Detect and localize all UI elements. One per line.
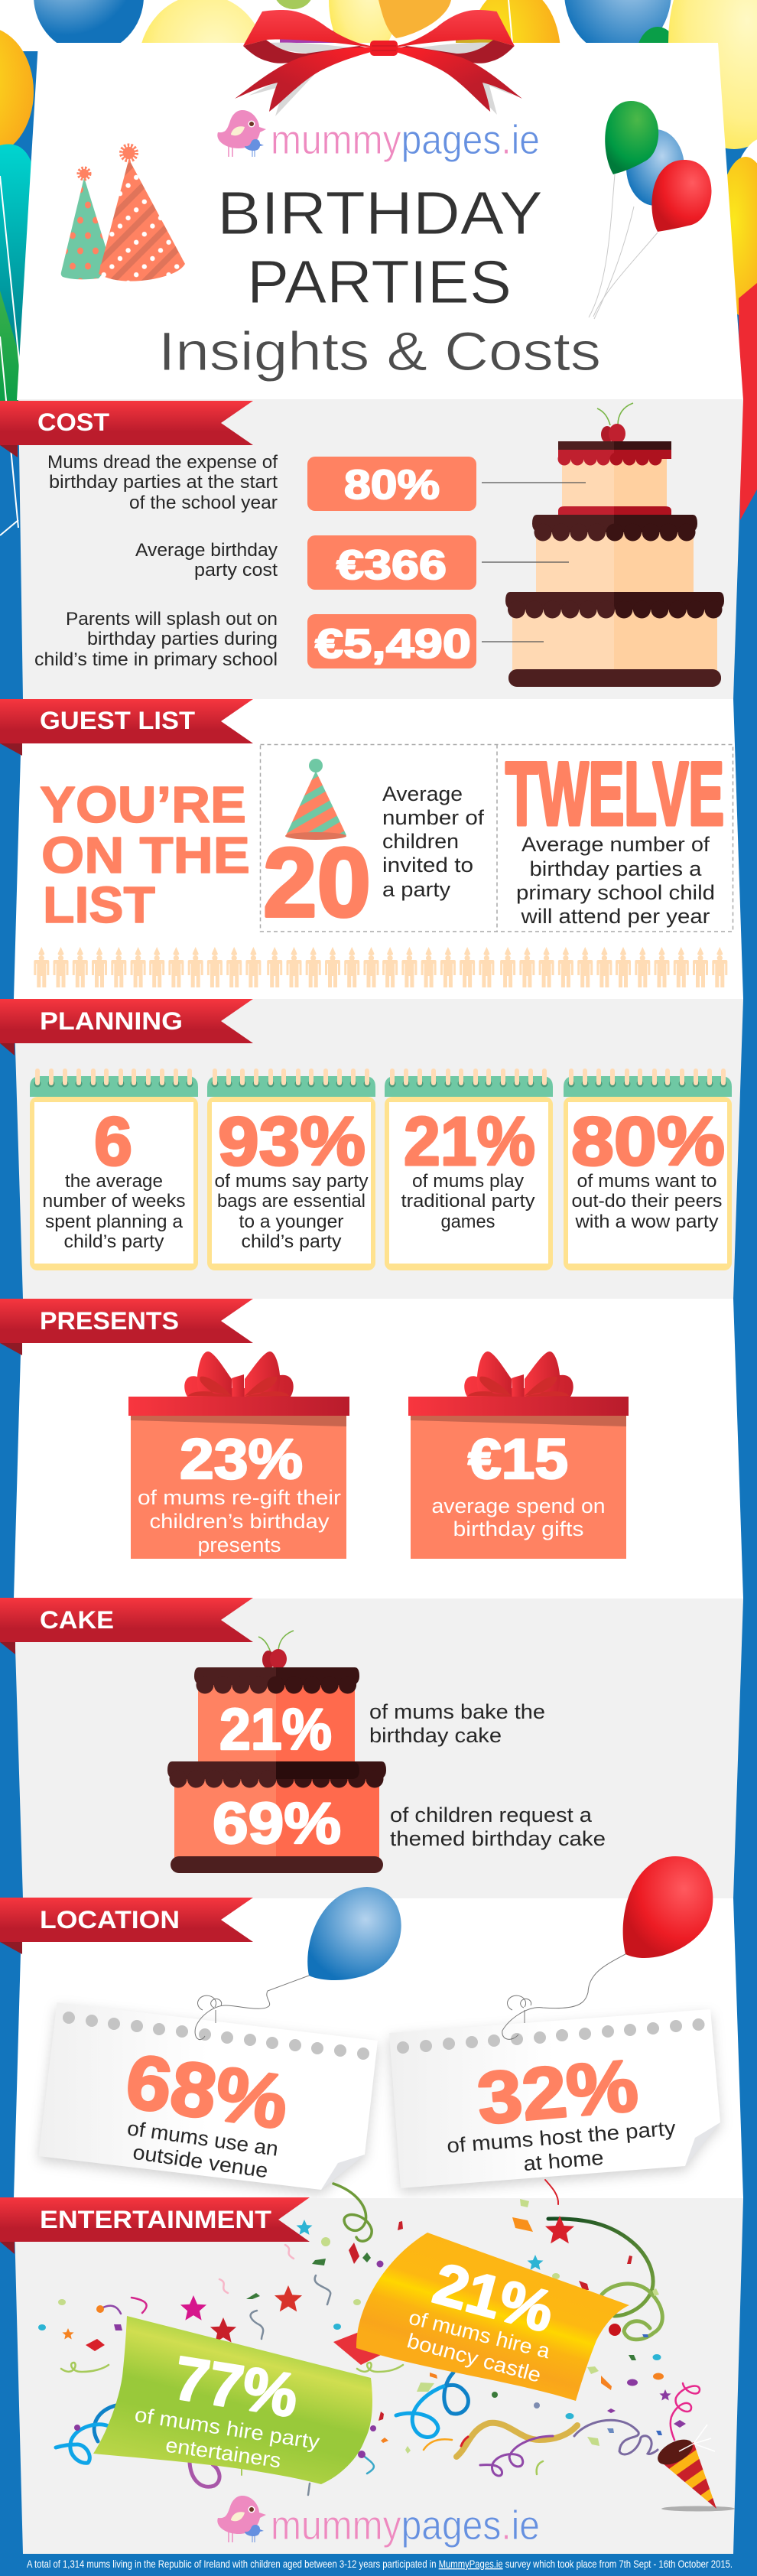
calendar: 21% [385,1071,553,1270]
stat: 20: 20 [263,828,371,938]
gift: €15: €15 [468,1427,568,1491]
heading: planning [0,999,253,1055]
icon row: people with party hats [34,947,727,987]
calendar: 6 weeks: child’s party [64,1231,164,1252]
panel: presents [0,1299,743,1599]
heading: entertainment [0,2197,310,2254]
gift: 23%: children’s birthday [150,1510,330,1533]
gift: 23%: of mums re-gift their [138,1486,341,1509]
logo: footer mummypages.ie: mummypages.ie [271,2503,540,2548]
panel: cake [0,1598,743,1898]
headline: you're on the list: LIST [43,877,155,934]
banner: party entertainers: entertainers [164,2434,282,2472]
text: expense: Mums dread the expense of [47,452,278,473]
calendar: 93%: to a younger [239,1212,344,1232]
text: children invited: invited to [382,854,473,877]
banner: party entertainers: 77% [170,2343,303,2430]
text: primary school: Parents will splash out on [66,609,278,629]
gift: 23%: presents [197,1534,281,1556]
calendar: 6 weeks: the average [65,1171,163,1192]
icon: striped party hat [285,759,346,840]
calendar: 93%: of mums say party [214,1171,369,1192]
heading: location [0,1898,253,1954]
text: children invited: Average [382,782,463,805]
text: average cost: Average birthday [135,540,278,561]
paper header [17,43,743,400]
panel: planning [0,999,743,1299]
leader lines [482,483,586,642]
balloon strings [195,1954,625,2040]
heading: cake [0,1598,253,1654]
calendar: 80% [564,1071,732,1270]
calendar: 80%: of mums want to [577,1171,717,1192]
heading: cost [0,401,253,457]
text: mums bake: of mums bake the [369,1700,545,1723]
heading: presents: PRESENTS [40,1307,179,1335]
icon: red balloon [623,1856,713,1958]
gift: 23%: 23% [180,1427,303,1491]
note: 68%: outside venue [132,2141,269,2182]
icon: three balloons [589,101,712,319]
title: BIRTHDAY [217,179,543,247]
text: primary school: birthday parties during [87,629,278,649]
banner: bouncy castle: of mums hire a [407,2306,553,2363]
text: parties per year: birthday parties a [529,857,703,880]
note: 32%: at home [522,2146,604,2175]
text: parties per year: Average number of [521,833,710,856]
text: children invited [382,782,485,901]
icon: two tier cake with stats: 21% [219,1697,332,1762]
calendar: 93%: child’s party [242,1231,341,1252]
calendar: 93%: 93% [218,1104,366,1180]
note: 68% [38,2002,378,2190]
banner: bouncy castle: 21% [427,2251,560,2345]
panel: location [0,1898,743,2198]
headline: you're on the list: ON THE [41,827,250,884]
calendar: 6 weeks: 6 [94,1104,132,1180]
calendar: 93% [207,1071,375,1270]
balloons behind the paper [0,0,757,535]
calendar: 80%: out-do their peers [572,1191,722,1212]
gift: €15 [408,1351,629,1559]
note: 68%: of mums use an [126,2116,280,2161]
banner: party entertainers [93,2316,372,2484]
title: Insights & Costs [158,322,601,382]
text: themed cake: of children request a [390,1804,593,1826]
text: parties per year: will attend per year [520,905,710,928]
text: average cost: party cost [194,560,278,581]
text: primary school: child’s time in primary school [34,649,278,670]
text: themed cake [390,1804,606,1850]
heading: cost: COST [37,408,109,436]
text: parties per year [516,833,715,928]
logo: mummypages.ie: mummypages.ie [271,117,540,163]
icon: two tier cake with stats [167,1631,386,1873]
text: mums bake: birthday cake [369,1724,502,1747]
note: 68%: 68% [121,2038,293,2145]
calendar: 80%: with a wow party [574,1212,719,1232]
text: expense: of the school year [129,493,278,513]
headline: you're on the list: YOU’RE [40,776,246,834]
text: children invited: a party [382,878,451,901]
icon: two tier cake with stats: 69% [213,1791,341,1856]
stat: €5,490: €5,490 [315,621,471,667]
calendar: 21%: of mums play [412,1171,524,1192]
headline: you're on the list [40,776,250,934]
title [158,179,601,382]
banner: bouncy castle: bouncy castle [404,2329,544,2387]
note: 32%: of mums host the party [446,2116,677,2158]
calendar: 6 weeks: number of weeks [43,1191,185,1212]
stat: €366: €366 [336,542,447,588]
icon: red bow [235,10,522,116]
stat: €5,490 [307,614,476,668]
note: 32%: 32% [474,2044,641,2140]
gift: €15: average spend on [431,1495,606,1517]
text: primary school [34,609,278,670]
text: expense: birthday parties at the start [49,472,278,493]
gift: €15: birthday gifts [453,1517,584,1540]
note: 32% [389,2009,720,2188]
heading: entertainment: ENTERTAINMENT [40,2206,272,2233]
text: children invited: children [382,830,459,853]
panel: entertainment [14,2198,743,2554]
heading: guest list [0,699,253,756]
calendar: 6 weeks: spent planning a [45,1212,184,1232]
text: themed cake: themed birthday cake [390,1827,606,1850]
panel: cost [0,399,743,699]
heading: guest list: GUEST LIST [40,707,195,734]
calendar: 21%: games [440,1212,495,1232]
calendar: 6 weeks [30,1071,198,1270]
heading: location: LOCATION [40,1906,180,1934]
title: PARTIES [247,248,512,316]
panel: guest list [0,699,743,999]
banner: party entertainers: of mums hire party [133,2403,321,2454]
calendar: 80%: 80% [571,1104,725,1180]
calendar: 93%: bags are essential [217,1191,366,1212]
icon: blue balloon [307,1887,401,1980]
text: expense [47,452,278,513]
stat: 80% [307,457,476,511]
heading: planning: PLANNING [40,1007,183,1035]
icon: party popper [654,2425,735,2512]
icon: three tier cake [505,403,724,687]
stat: €366 [307,535,476,590]
text: average cost [135,540,278,581]
confetti and streamers [38,2180,700,2495]
icon: party hats [61,147,185,281]
text: children invited: number of [382,806,485,829]
text: mums bake [369,1700,545,1747]
text: parties per year: primary school child [516,881,715,904]
heading: presents [0,1299,253,1355]
dashed frame [260,745,733,932]
gift: 23% [128,1351,349,1559]
calendar: 21%: traditional party [401,1191,535,1212]
banner: bouncy castle [356,2233,629,2401]
calendar: 21%: 21% [404,1104,535,1180]
heading: cake: CAKE [40,1606,114,1634]
stat: 80%: 80% [344,462,440,508]
